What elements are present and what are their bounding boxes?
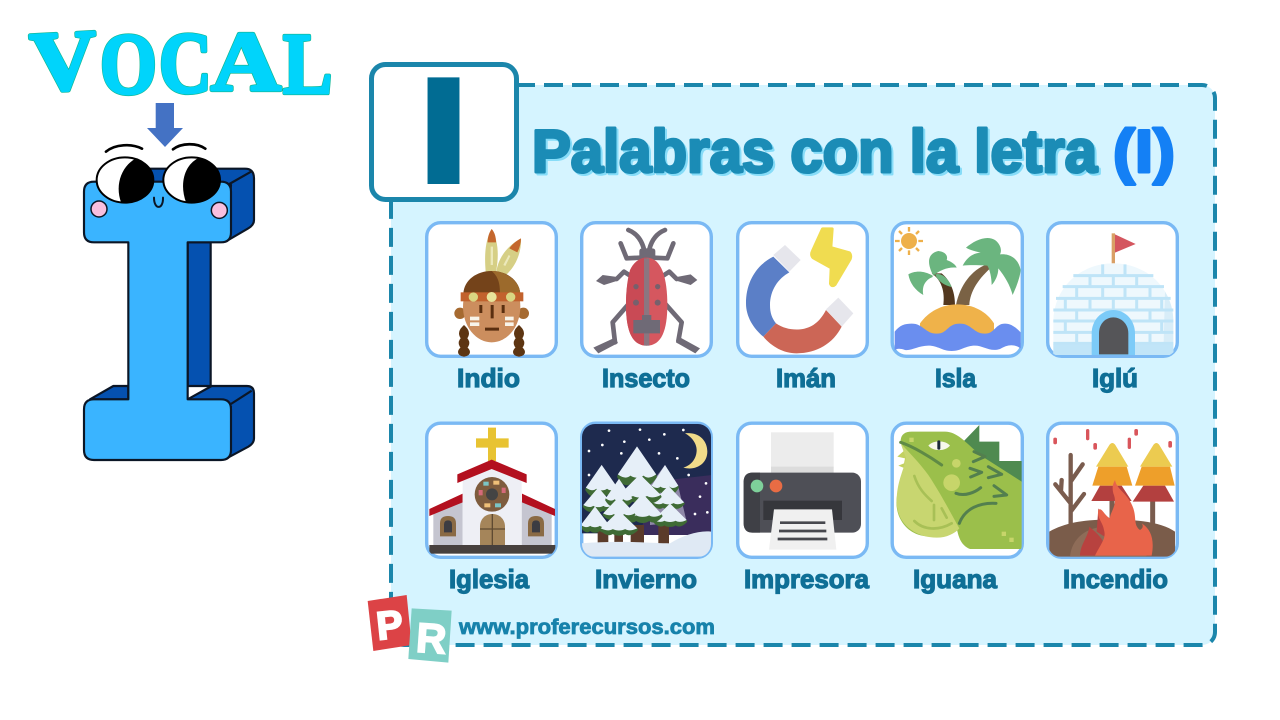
logo: PR	[368, 595, 452, 663]
label: Iglú	[1092, 363, 1138, 393]
card: Iglesia	[427, 423, 556, 594]
red P tile: P	[374, 602, 405, 649]
title: VOCAL: C	[159, 16, 212, 111]
title: VOCAL: O	[100, 17, 157, 112]
card: Insecto	[582, 223, 711, 393]
icon: insect	[593, 230, 700, 353]
icon: iguana	[896, 425, 1022, 549]
card: Isla	[892, 223, 1022, 393]
big letter I: I	[413, 44, 474, 217]
label: Iglesia	[449, 564, 530, 594]
label: Insecto	[602, 363, 690, 393]
icon: indigenous person	[454, 229, 529, 354]
icon: island	[895, 227, 1021, 351]
panel: words with letter I	[391, 85, 1215, 645]
title: VOCAL: L	[283, 17, 332, 112]
icon: forest fire	[1049, 429, 1175, 557]
title: VOCAL: C	[159, 16, 212, 111]
card: Iguana	[892, 423, 1022, 594]
heading: Palabras con la letra	[532, 118, 1098, 185]
heading: (I)	[1113, 118, 1175, 185]
label: Incendio	[1063, 564, 1168, 594]
label: Imán	[776, 363, 836, 393]
title: VOCAL: A	[211, 14, 281, 109]
icon: magnet	[746, 229, 853, 353]
label: Invierno	[595, 564, 697, 594]
left eye	[97, 157, 155, 204]
title: VOCAL: L	[283, 17, 332, 112]
letter front face	[84, 182, 231, 460]
title: VOCAL: V	[28, 13, 99, 110]
card: Iglú	[1048, 223, 1177, 393]
mouth	[154, 198, 163, 207]
character: letter I	[84, 144, 254, 460]
right eye	[163, 157, 222, 204]
teal R tile: R	[415, 614, 448, 663]
card: Impresora	[738, 423, 870, 594]
card: Invierno	[580, 423, 712, 594]
label: Iguana	[913, 564, 998, 594]
title: VOCAL: O	[100, 17, 157, 112]
heading: Palabras con la letra	[534, 120, 1100, 187]
card: Incendio	[1048, 423, 1177, 594]
eyebrows	[106, 144, 205, 152]
label: Impresora	[744, 564, 870, 594]
website: www.proferecursos.com	[458, 616, 715, 639]
letter side faces	[90, 169, 254, 458]
icon: printer	[744, 432, 861, 550]
title: VOCAL	[28, 13, 332, 112]
letter box	[372, 44, 516, 217]
card: Indio	[427, 223, 556, 393]
title: VOCAL: A	[211, 14, 281, 109]
icon: igloo	[1053, 233, 1173, 355]
label: Indio	[457, 363, 520, 393]
label: Isla	[935, 363, 977, 393]
title: VOCAL: V	[28, 13, 99, 110]
card: Imán	[738, 223, 867, 393]
icon: church	[429, 428, 555, 554]
cheeks	[91, 201, 227, 218]
icon: winter night	[580, 423, 712, 557]
arrow: down to the character	[147, 103, 183, 147]
